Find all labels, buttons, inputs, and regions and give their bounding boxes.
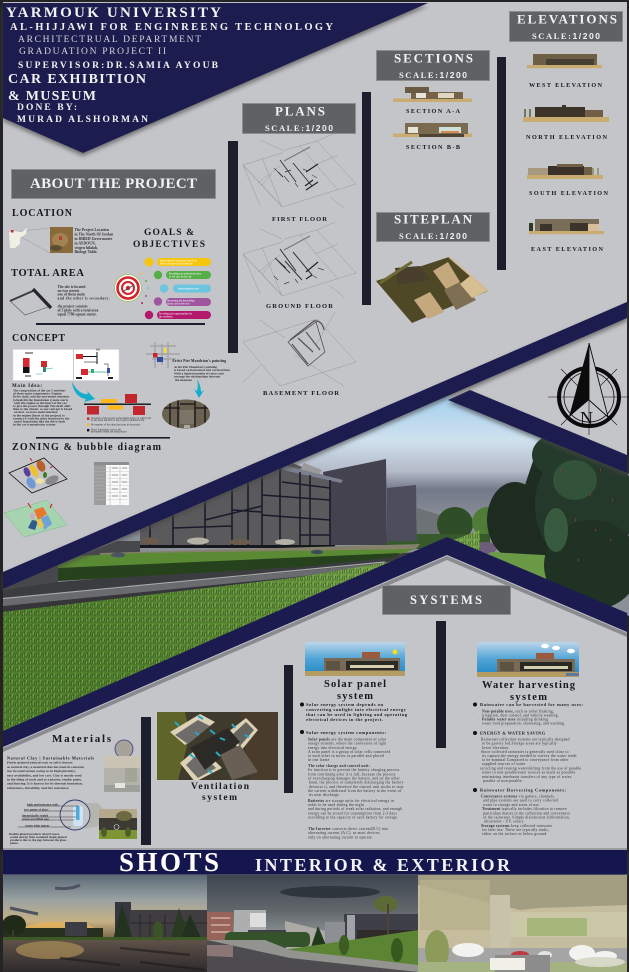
rainwater components text: and pipe systems are used to carry collected — [483, 799, 558, 803]
west elevation drawing — [527, 54, 602, 68]
clay building image — [104, 756, 140, 792]
Mondrian text: arrange the relationships between — [174, 375, 220, 379]
east elevation label: EAST ELEVATION — [531, 246, 604, 253]
panel: about the project heading: ABOUT THE PROJECT — [30, 176, 197, 192]
glazing detail — [18, 800, 108, 830]
main idea text: on that. we have main function — [14, 410, 58, 414]
panel: goals and objectives — [114, 228, 211, 319]
course: GRADUATION PROJECT II — [19, 47, 166, 57]
energy and water saving text: water to non-potablewater sources as much as possible — [482, 771, 576, 775]
site plan heading: SCALE:1/200 — [399, 231, 467, 241]
energy and water saving text: its capture,the energy needed to convey the water tends — [482, 754, 577, 759]
glazing text: panes. — [10, 841, 19, 845]
energy and water saving text: to be gravity fed.Storage areas are typically — [482, 742, 557, 746]
rainwater components text: particulate matter in the collection and conveyance — [483, 811, 571, 815]
sections heading: SECTIONS — [394, 50, 473, 66]
energy and water saving text: Rainwater collection systems are typically designed — [481, 738, 570, 742]
goal 2: to tell cars in the city — [169, 276, 192, 279]
main idea text: Drive shaft, and the movement elements — [13, 395, 70, 399]
first floor label: FIRST FLOOR — [272, 216, 327, 223]
total area text: The site is located — [58, 285, 86, 289]
Mondrian text — [174, 365, 231, 382]
water uses text — [478, 710, 565, 727]
heading: location: LOCATION — [12, 208, 73, 219]
Mondrian text: the elements — [175, 378, 193, 382]
energy and water saving heading: ENERGY & WATER SAVING — [480, 730, 546, 736]
goal 5 — [145, 311, 211, 319]
south elevation label: SOUTH ELEVATION — [529, 190, 609, 197]
rainwater components text: either on the surface or below ground. — [482, 832, 547, 836]
goal 3: entertainment area — [178, 288, 199, 290]
panel: exterior lake shot — [207, 875, 418, 972]
solar components text: Batteries are storage units for electrical energy in — [308, 799, 394, 803]
wall and road — [3, 541, 140, 590]
concept sketches — [13, 348, 119, 380]
rainwater components text: ultraviolet - UV, solar). — [484, 820, 524, 825]
rainwater components text — [481, 794, 571, 836]
elevations heading — [510, 12, 622, 42]
west elevation label: WEST ELEVATION — [529, 82, 603, 89]
heading: objectives: OBJECTIVES — [133, 240, 205, 250]
solar components text: order to be used during the night — [308, 803, 364, 807]
panel: concept — [12, 333, 231, 434]
glazing text — [9, 832, 67, 845]
solar components text: The solar charge and control unit: — [308, 764, 370, 768]
main idea text: (wheels)In the foundation system starts — [13, 398, 69, 402]
solar components text: energy can be stored for consumption from 2-3 days — [308, 811, 397, 815]
map of Jordan with satellite inset — [9, 227, 73, 253]
first floor plan — [243, 133, 356, 208]
north elevation label: NORTH ELEVATION — [526, 134, 608, 141]
solar components text: ◦ — [305, 828, 306, 831]
solar intro: Solar energy system components: — [306, 730, 386, 735]
panel: plans — [242, 104, 356, 397]
goal 1 — [144, 258, 211, 266]
far trees and glass pavilion — [385, 507, 504, 554]
location text: in The North Of Jordan — [74, 232, 114, 236]
Mondrian text: is based on horizontal and vertical lines — [174, 368, 231, 372]
glazing detail: argon gas-filled gap — [22, 817, 49, 821]
Mondrian text: Artist Piet Mondrian's painting — [174, 365, 217, 369]
navy band: diagonal — [3, 302, 627, 589]
Mondrian sketch — [146, 342, 180, 368]
site plan image — [376, 257, 488, 323]
energy and water saving text: to be minimal Compared to conveyance from other — [482, 758, 569, 762]
energy and water saving text: recycling and reusing watershifting from the use of potable — [480, 766, 582, 770]
clay text: and flooring. It is known for its thermal insulation, — [7, 782, 83, 786]
section A-A drawing — [393, 87, 472, 102]
solar components text: to each other in series or parallel and placed — [308, 754, 384, 758]
concept diagram: Metal foundation convert the — [91, 428, 122, 432]
main idea text: in the engine (heart of the project) to — [13, 413, 65, 417]
solar components text: hand, the process of completely discharging the battery — [309, 781, 404, 786]
main idea text: in the car transmission system — [13, 423, 56, 427]
Mondrian text: With a limited number of colors and — [174, 371, 224, 375]
clay text: use in construction owing to its high plasticity, — [7, 769, 76, 773]
navy band: upper right roof — [448, 390, 627, 473]
ground floor label: GROUND FLOOR — [266, 303, 333, 310]
ground floor plan — [243, 222, 356, 297]
Mondrian heading: Artist Piet Mondrian's painting — [172, 359, 226, 363]
north elevation drawing — [523, 105, 609, 122]
main idea text — [13, 388, 72, 427]
solar components text: A solar panel is a group of solar cells connected — [308, 750, 390, 754]
ventilation label: Ventilation — [191, 782, 250, 792]
sections heading: SCALE:1/200 — [399, 70, 467, 80]
faculty name: AL-HIJJAWI FOR ENGINREENG TECHNOLOGY — [10, 22, 333, 33]
solar title line 2: system — [337, 691, 373, 702]
area table — [94, 462, 129, 505]
main idea text: then to the wheels. so our concept is based — [13, 407, 72, 411]
department: ARCHITECTRUAL DEPARTMENT — [18, 35, 201, 45]
panel: location — [9, 208, 114, 254]
ventilation label line 2: system — [202, 793, 237, 803]
goal 4 — [154, 297, 211, 306]
glazing building image — [99, 809, 137, 839]
glazing detail: high performance seals — [27, 802, 59, 806]
goal 4: Increasing the knowledge — [167, 300, 195, 302]
glazing text: products due to the gap between the glass — [10, 838, 67, 842]
solar components text: in one frame — [308, 758, 330, 762]
water uses heading: Rainwater can be harvested for many uses: — [480, 702, 584, 707]
project name: CAR EXHIBITION — [8, 72, 146, 87]
building — [140, 459, 417, 548]
solar components text: destroys it, and therefore the control unit works to stop — [309, 785, 404, 790]
total area text: and the other is secondary. — [58, 296, 110, 300]
hedge planter — [58, 544, 420, 581]
water section image — [477, 642, 579, 677]
author: MURAD ALSHORMAN — [17, 115, 148, 125]
heading: concept: CONCEPT — [12, 333, 65, 344]
done by: DONE BY: — [17, 103, 77, 113]
total area text: equal 7786 square meter. — [58, 312, 97, 316]
lawn — [3, 530, 480, 731]
main idea text: metal foundation like the drive shaft — [14, 420, 66, 424]
glazing detail: warm edge spacer — [25, 824, 50, 828]
panel: systems heading: SYSTEMS — [410, 593, 482, 607]
solar components text: the current withdrawal from the battery in the event of — [308, 789, 402, 793]
heading: goals: GOALS & — [144, 228, 194, 238]
solar intro — [300, 702, 408, 735]
location text: in IRBED Governorate — [74, 237, 113, 241]
solar components text: only on alternating current to operate. — [308, 835, 373, 839]
panel: materials — [7, 733, 140, 845]
main idea text: to give the power through The draft shift — [13, 404, 71, 408]
panel: site plan — [376, 212, 490, 323]
goal 4: about cars in the city — [167, 303, 190, 306]
location text: The Project Location — [74, 228, 110, 232]
goal 2 — [154, 271, 211, 279]
water uses text: irrigation, dust control, and vehicle washing. — [482, 714, 559, 718]
energy and water saving text — [480, 738, 582, 783]
panel: zoning and bubble diagram — [4, 442, 162, 537]
elevations heading: ELEVATIONS — [517, 12, 617, 26]
solar intro: that can be used in lighting and operating — [306, 712, 408, 717]
concept diagram: movement within the main project — [91, 430, 127, 434]
concept diagram — [84, 394, 151, 434]
site drawing — [10, 289, 51, 315]
solar components text: Its function is to prevent the battery charging process — [308, 768, 400, 772]
solar components text: ◦ — [305, 765, 306, 768]
glazing detail: two panes of glass — [24, 808, 49, 812]
solar components text — [305, 738, 404, 839]
main idea text: with the engine as the heart of the car — [14, 401, 67, 405]
rainwater components text: of the rainwater. Simple disinfection (chlorination, — [483, 816, 570, 821]
clay swatch — [115, 740, 133, 758]
rainwater components text: Treatment typically includes filtration to remove — [482, 807, 567, 811]
solar components text: of overcharging damages the battery, and on the other — [308, 776, 401, 781]
panel: ventilation system — [157, 712, 278, 803]
clay text: Finely grained natural rock or soil is known — [7, 760, 73, 764]
clay text: as natural clay, a material that has been in constant — [7, 765, 85, 769]
solar section image — [305, 642, 405, 676]
goal 2: Providing an authorized place — [169, 272, 202, 276]
water uses text: water food preparation, showering, and washing. — [482, 722, 565, 727]
panel: solar panel system — [300, 642, 408, 839]
clay subheading: Natural Clay | Sustainable Materials — [7, 756, 94, 760]
solar components text: from continuing after it is full, because the process — [308, 772, 396, 777]
navy band: systems roof left leg — [3, 537, 447, 747]
panel: about the project heading — [12, 170, 216, 198]
location text: virgen hilalah, — [74, 246, 98, 250]
zoning plan — [4, 500, 67, 537]
solar components text: and during periods of weak solar radiation, and enough — [308, 807, 402, 812]
glazing text: sound energy than standard single-glazed — [10, 835, 67, 839]
total area text: one of them main — [58, 292, 85, 296]
panel: interior shot — [418, 875, 627, 972]
icon: north arrow compass: N — [580, 408, 593, 428]
site plan heading — [376, 212, 490, 242]
plans heading — [242, 104, 356, 134]
panel: exterior sunset shot — [2, 875, 207, 972]
concept diagram: The heart of the project is the engine in the car which will — [91, 417, 151, 420]
energy and water saving text: potable or non-potable. — [483, 779, 523, 783]
concept diagram: Movements of the other functions in the project — [91, 424, 141, 426]
section B-B drawing — [393, 123, 472, 137]
water title: Water harvesting — [482, 680, 576, 691]
arrow: sketch to diagram — [72, 382, 95, 402]
rainwater components heading: Rainwater Harvesting Components: — [480, 788, 567, 792]
glazing detail: hermetically sealed — [22, 814, 48, 818]
south elevation drawing — [527, 164, 603, 179]
solar components text: ◦ — [305, 738, 306, 742]
rainwater components text: water to storage and areas of use. — [483, 803, 540, 807]
rainwater components text: for later use. These are typically tanks, — [482, 828, 549, 833]
solar components text: alternating current (A.C), as most devices — [308, 831, 380, 836]
clay text: robustness, durability, and fire resistance. — [7, 786, 69, 790]
east elevation drawing — [529, 219, 604, 234]
panel: systems heading — [382, 586, 510, 614]
water uses text: ◦ — [478, 718, 479, 722]
main idea heading: Main Idea: — [12, 384, 42, 389]
elliptical building photo — [162, 400, 210, 428]
water uses text: Potable water uses including drinking — [482, 718, 548, 722]
panel: sections — [376, 50, 490, 151]
plans heading: PLANS — [275, 104, 325, 118]
clay text: in the tiling of roofs and as a plaster, render paint, — [7, 778, 82, 782]
plans heading: SCALE:1/200 — [265, 123, 333, 133]
solar intro: converting sunlight into electrical energy — [306, 707, 407, 712]
section B-B label: SECTION B-B — [406, 144, 460, 151]
goal 5: Providing job opportunities for — [159, 312, 192, 316]
panel: water harvesting system — [473, 642, 584, 836]
basement floor plan — [243, 312, 356, 386]
heading: zoning: ZONING & bubble diagram — [12, 442, 162, 453]
solar components text: energy systems, where the conversion of light — [308, 742, 386, 747]
panel: shots heading band: INTERIOR & EXTERIOR — [255, 855, 511, 875]
navy band: systems roof right leg — [447, 537, 627, 632]
solar intro: Solar energy system depends on — [306, 702, 383, 707]
water uses text: Non-potable uses, such as toilet flushing, — [482, 710, 554, 714]
rainwater components text: Conveyance systems via gutters, channels, — [481, 794, 555, 800]
location text — [74, 228, 114, 254]
panel: elevations — [510, 12, 622, 253]
water uses text: ◦ — [478, 710, 479, 714]
big trees — [487, 433, 629, 610]
total area text: the project consists — [58, 304, 88, 308]
panel: total area — [10, 268, 110, 316]
navy band shadow — [3, 556, 627, 752]
total area text — [58, 285, 110, 316]
rainwater components text: Storage systems keep collected rainwater — [481, 824, 553, 828]
energy and water saving text: lower elevation. — [482, 746, 510, 750]
solar components text: according to the capacity of each battery for storage. — [308, 816, 398, 820]
clay text — [7, 760, 85, 790]
energy and water saving text: Since collected rainwater is generally used close to — [481, 750, 569, 754]
heading: total area: TOTAL AREA — [11, 268, 84, 279]
icon: target — [114, 274, 142, 302]
supervisor: SUPERVISOR:DR.SAMIA AYOUB — [18, 61, 219, 71]
basement floor label: BASEMENT FLOOR — [263, 390, 339, 397]
bubble diagram — [9, 458, 67, 493]
university title: YARMOUK UNIVERSITY — [6, 5, 221, 21]
total area text: on two streets — [58, 289, 80, 293]
concept diagram: be the main function of the project (exhibition hall) — [91, 419, 144, 422]
panel: shots heading band: SHOTS — [119, 847, 219, 877]
clay text: easy availability, and low cost. Clay is mostly used — [7, 773, 82, 777]
elevations heading: SCALE:1/200 — [532, 31, 600, 41]
goal 1: Improving the economy overall in — [160, 260, 197, 262]
site plan heading: SITEPLAN — [394, 212, 473, 226]
ventilation top view image — [157, 712, 278, 782]
energy and water saving text: supplied sources of water — [482, 762, 526, 766]
arrow: painting to photo — [194, 379, 204, 398]
solar title: Solar panel — [324, 679, 386, 690]
water title line 2: system — [510, 692, 547, 703]
goal 5: the residents — [159, 316, 173, 319]
solar components text: Solar panels are the main component of solar — [308, 738, 387, 742]
sections heading — [376, 50, 490, 80]
panel: shots heading band — [3, 847, 627, 877]
energy and water saving text: minimizing interbasin transfers of any type of water, — [482, 775, 572, 780]
icon: north arrow compass — [548, 343, 629, 435]
solar components text: its near discharge. — [309, 793, 340, 797]
solar components text: energy into electrical energy. — [308, 746, 358, 750]
header navy banner — [3, 3, 428, 153]
location text: Biology Table. — [74, 250, 98, 254]
main idea text: connect it with the other function by the — [13, 416, 70, 420]
decorative dots row — [140, 273, 149, 304]
section A-A label: SECTION A-A — [406, 108, 461, 115]
solar intro: electrical devices in the project. — [306, 717, 383, 722]
total area text: of 5 plots with a total area — [58, 308, 99, 312]
solar components text: The Inverter converts direct current(D.C) into — [308, 827, 388, 831]
materials heading: Materials — [52, 733, 112, 745]
hero photograph: building exterior — [3, 396, 629, 731]
main idea text: of three main components: Engine, — [13, 392, 62, 396]
project name line 2: & MUSEUM — [8, 89, 96, 104]
location text: in AYDOUN, — [74, 242, 96, 246]
solar components text: ◦ — [305, 800, 306, 803]
main idea text: The composition of the car Combines — [13, 388, 66, 392]
glazing text: Double-glazed products absorb more — [9, 832, 60, 836]
goal 1: Irbid and especially in Aydoun — [160, 263, 194, 266]
